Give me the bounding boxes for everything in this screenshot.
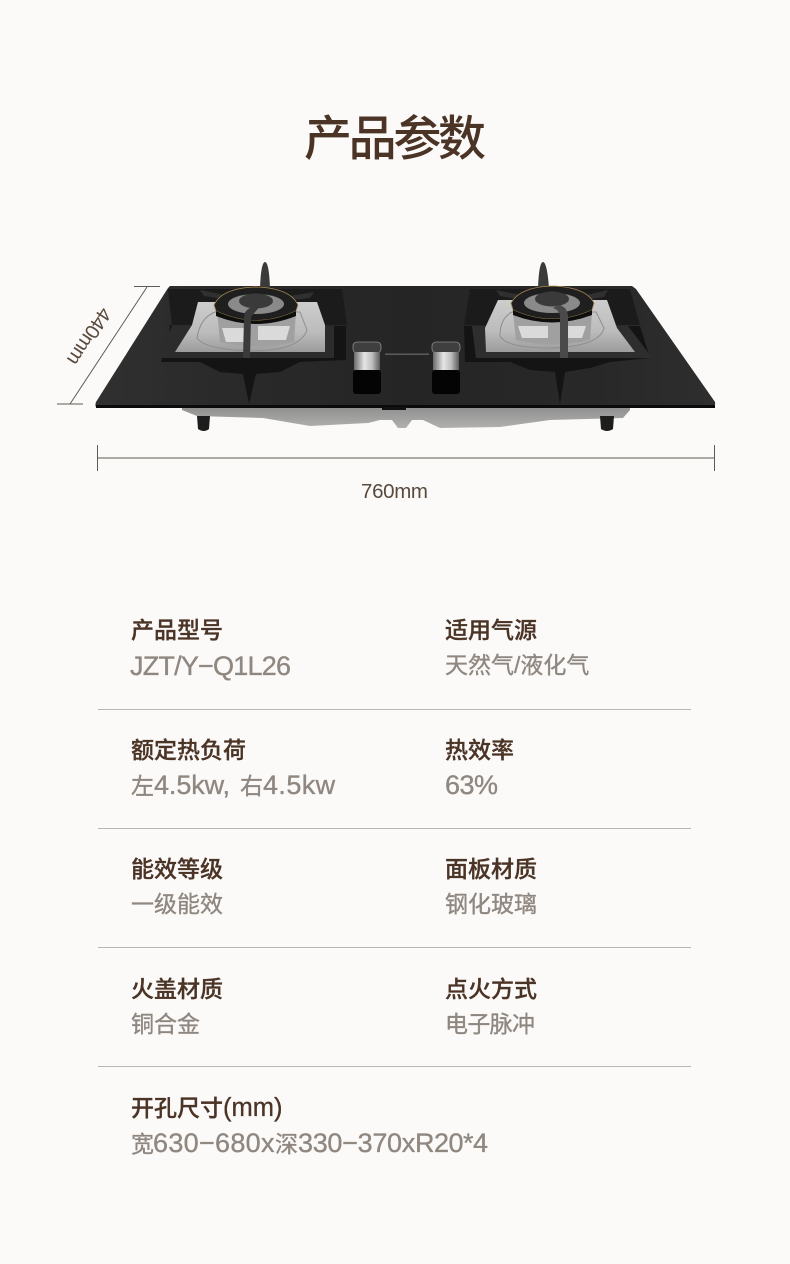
spec: thermal efficiency: 63% [445,770,498,800]
spec: rated heat load: 额定热负荷 [131,737,246,763]
spec: rated heat load: 右 [240,773,263,799]
spec: cutout size: (mm) [223,1094,282,1122]
left knob [353,342,381,394]
depth dimension: 440mm [62,303,115,369]
spec: rated heat load [131,737,336,800]
left burner [161,262,347,404]
spec: gas source: 天然气/液化气 [445,652,589,678]
spec: burner cap material [131,976,223,1037]
spec: gas source: 适用气源 [445,617,537,643]
spec: thermal efficiency [445,737,514,800]
spec: cutout size: R20*4 [415,1128,488,1158]
spec: cutout size [131,1094,488,1158]
hob underbody [182,407,630,431]
spec: gas source [445,617,589,678]
brand mark [385,354,429,355]
spec: ignition [445,976,537,1037]
spec: thermal efficiency: 热效率 [445,737,514,763]
spec: rated heat load: 左 [131,773,154,799]
spec: rated heat load: 4.5kw, [154,770,230,800]
spec: panel material: 钢化玻璃 [445,891,537,917]
spec: ignition: 点火方式 [445,976,537,1002]
width dimension: 760mm [361,480,428,503]
spec: burner cap material: 铜合金 [131,1011,200,1037]
spec: energy grade: 一级能效 [131,891,223,917]
spec: cutout size: 深 [275,1131,298,1157]
right burner [464,262,650,404]
spec: model: JZT/Y−Q1L26 [130,651,291,681]
spec: panel material: 面板材质 [445,856,537,882]
spec: energy grade: 能效等级 [131,856,223,882]
hob glass top [95,286,715,408]
spec: panel material [445,856,537,917]
title: 产品参数 [304,113,486,166]
width dimension [97,445,715,503]
right knob [432,342,460,394]
spec: model [130,617,291,681]
spec: model: 产品型号 [131,617,223,643]
spec: cutout size: 330−370x [298,1128,416,1158]
depth dimension [57,286,160,404]
spec: rated heat load: 4.5kw [263,770,336,800]
spec: burner cap material: 火盖材质 [131,976,223,1002]
spec: cutout size: 宽 [131,1131,154,1157]
spec: energy grade [131,856,223,917]
product image: gas hob [95,262,715,431]
spec: cutout size: 开孔尺寸 [131,1095,223,1121]
spec: cutout size: 630−680x [153,1128,275,1158]
spec: ignition: 电子脉冲 [445,1011,535,1037]
